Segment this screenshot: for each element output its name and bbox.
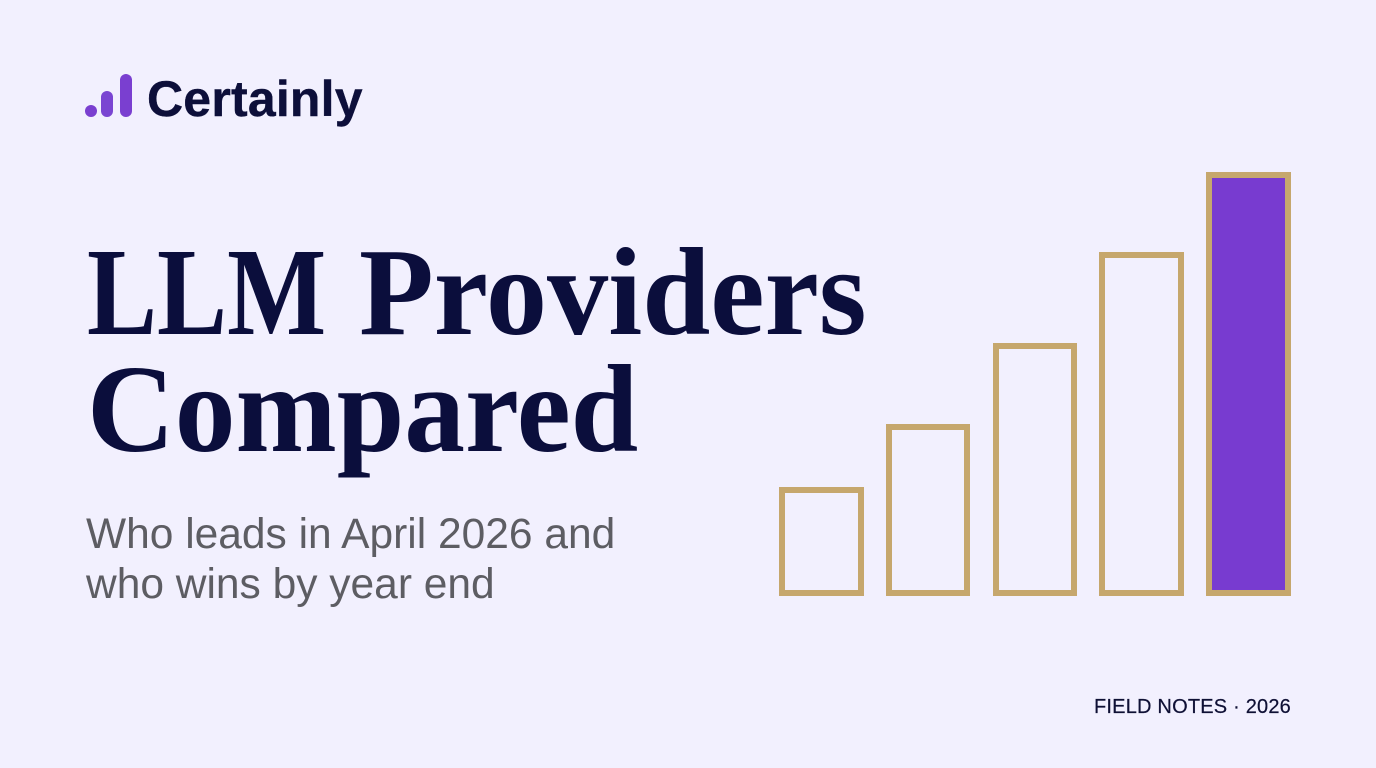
title: LLM: [87, 224, 326, 362]
bar 1: [779, 487, 864, 596]
logo: [85, 71, 363, 127]
bar 2: [886, 424, 970, 596]
subtitle: who wins by year end: [86, 560, 495, 608]
bar 5 highlighted: [1206, 172, 1291, 596]
bar 4: [1099, 252, 1184, 596]
icon: logo bars: [85, 74, 132, 117]
footer label: FIELD NOTES · 2026: [1094, 696, 1291, 718]
title: Compared: [87, 341, 638, 479]
bar chart: [779, 172, 1291, 596]
title: Providers: [359, 224, 867, 362]
subtitle: [86, 511, 615, 608]
logo wordmark: Certainly: [147, 71, 363, 127]
title: [87, 224, 867, 479]
bar 3: [993, 343, 1077, 596]
subtitle: Who leads in April 2026 and: [86, 511, 615, 558]
